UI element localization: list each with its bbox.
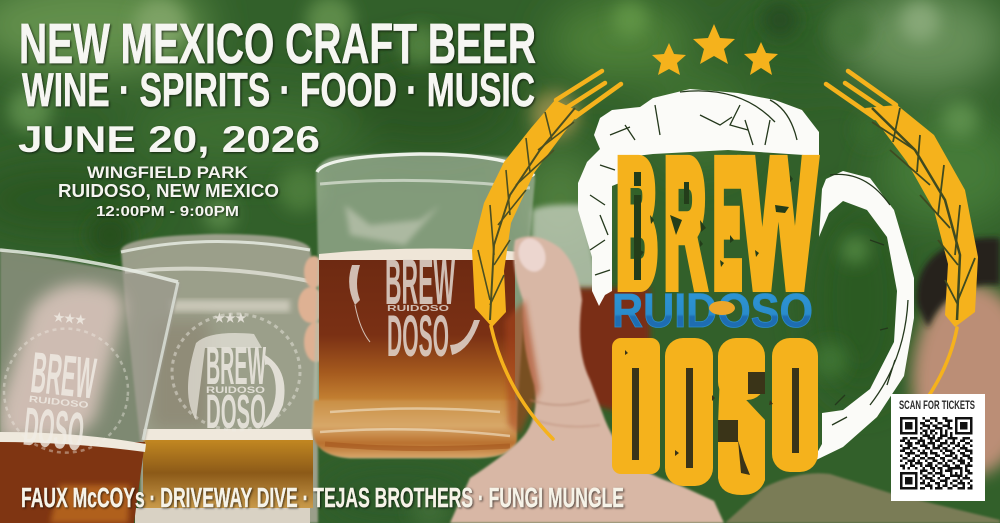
hand seen through left glass — [0, 283, 125, 440]
BREW lettering: B — [616, 123, 658, 323]
venue and time: RUIDOSO, NEW MEXICO — [58, 181, 279, 201]
etched logo on left glass: ★★★ — [53, 310, 87, 327]
sweater — [725, 473, 1000, 523]
band line-up: FAUX McCOYs · DRIVEWAY DIVE · TEJAS BROTHERS · FUNGI MUNGLE — [21, 482, 624, 513]
etched logo on middle glass: ★★★ — [214, 311, 247, 325]
awns — [826, 71, 896, 118]
beer — [0, 442, 145, 523]
beer body — [319, 260, 515, 410]
venue and time: 12:00PM - 9:00PM — [96, 203, 239, 220]
etched logo on main glass: RUIDOSO — [387, 304, 449, 313]
date: JUNE 20, 2026 — [18, 119, 320, 160]
right wheat — [826, 71, 978, 400]
DOSO lettering: O — [670, 315, 708, 507]
glass behind the hand — [530, 205, 650, 412]
heading — [19, 12, 536, 116]
DOSO lettering: S — [722, 309, 762, 523]
orange-red tint at the palm — [505, 300, 540, 435]
sun in the O — [709, 301, 735, 315]
RUIDOSO lettering: RUIDOSO — [612, 285, 813, 338]
three stars — [652, 24, 778, 75]
stem — [926, 328, 957, 400]
foam — [319, 248, 520, 264]
logo: Brew Ruidoso — [472, 24, 978, 523]
etched logo on left glass: DOSO — [21, 397, 87, 463]
beer — [143, 438, 313, 508]
BREW lettering: E — [713, 123, 742, 323]
main beer glass — [312, 153, 535, 458]
mug handle — [812, 171, 914, 462]
distress marks on BREW — [634, 172, 793, 280]
letter blocks — [612, 338, 818, 495]
glass base — [312, 400, 517, 458]
face — [912, 284, 1000, 476]
hair — [917, 238, 1000, 328]
etched logo on main glass — [349, 246, 480, 369]
etched logo on left glass: RUIDOSO — [28, 394, 89, 410]
venue and time: WINGFIELD PARK — [87, 163, 249, 182]
etched logo on left glass: BREW — [28, 340, 99, 411]
QR code — [900, 418, 972, 488]
stem — [491, 326, 553, 439]
middle beer glass — [121, 234, 318, 523]
logo: Brew Ruidoso: W — [741, 123, 816, 323]
etched logo on left glass — [0, 306, 136, 467]
thumbnail — [514, 235, 550, 275]
etched logo on middle glass: DOSO — [206, 386, 266, 439]
title line 1: NEW MEXICO CRAFT BEER — [19, 12, 536, 76]
left wheat — [472, 71, 621, 439]
left beer glass — [0, 250, 180, 523]
etched logo on main glass: DOSO — [387, 304, 449, 369]
distress marks on DOSO — [625, 350, 799, 475]
person in background — [725, 238, 1000, 523]
fingers behind main glass — [298, 256, 328, 362]
splash etched detail — [345, 205, 440, 245]
BREW lettering — [616, 123, 816, 323]
mug foam — [578, 89, 819, 306]
holding hand — [450, 235, 724, 523]
awns — [556, 71, 621, 117]
title line 2: WINE · SPIRITS · FOOD · MUSIC — [22, 63, 535, 116]
main beer glass: BREW — [385, 246, 455, 318]
BREW lettering: R — [664, 123, 706, 323]
etched logo on middle glass: BREW — [206, 336, 266, 396]
etched logo on middle glass: RUIDOSO — [206, 385, 265, 395]
logo: Brew Ruidoso: O — [776, 315, 814, 499]
etched logo on middle glass — [172, 311, 300, 439]
venue and time — [58, 163, 279, 220]
QR code panel — [891, 394, 985, 501]
DOSO lettering — [612, 309, 818, 523]
DOSO lettering: D — [618, 313, 656, 505]
